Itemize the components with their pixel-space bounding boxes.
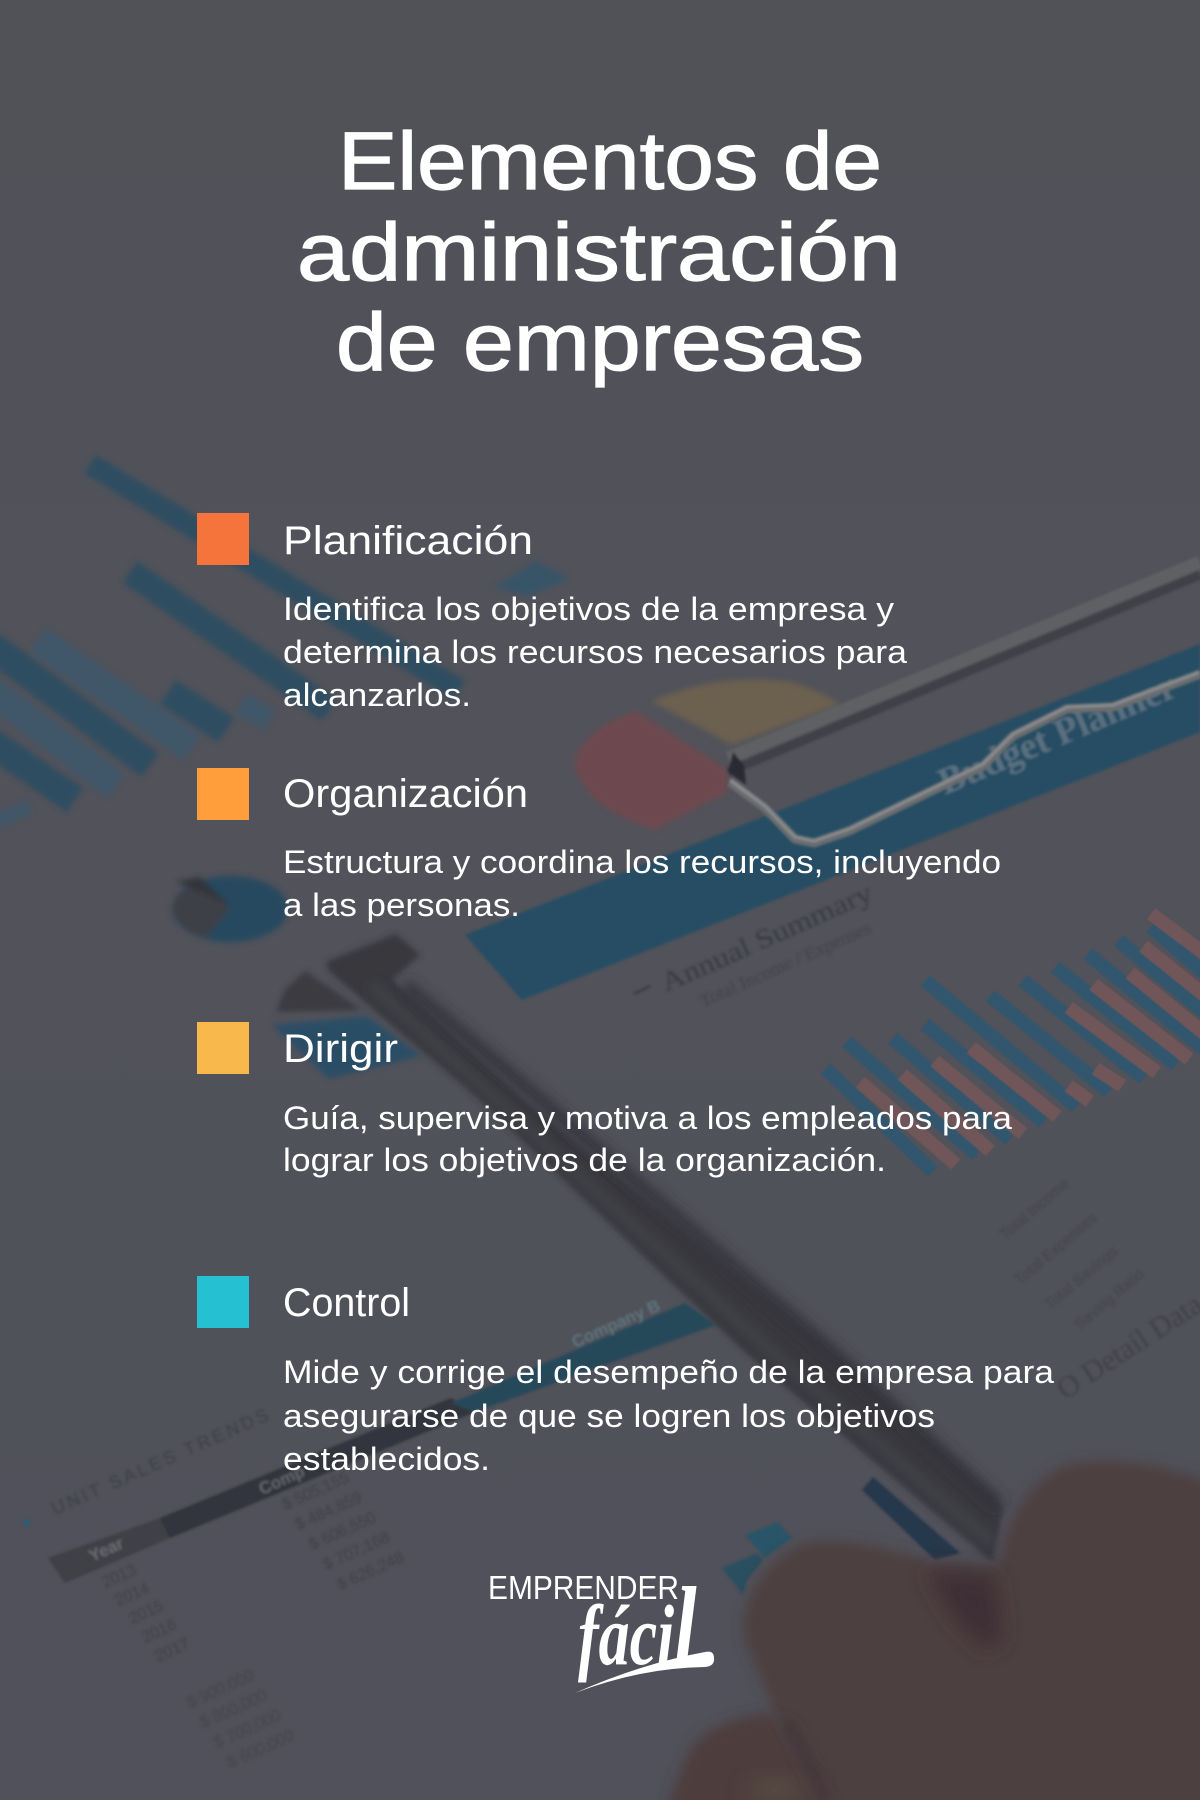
table figures: $ 606,550 [307, 1509, 379, 1554]
text: Planificación description: determina los recursos necesarios para [283, 634, 907, 670]
table figures: $ 626,248 [335, 1549, 407, 1594]
unit sales table: UNIT SALES TRENDS [48, 1405, 271, 1519]
item: Control [197, 1276, 1054, 1477]
text: Control description: asegurarse de que se logren los objetivos [283, 1398, 935, 1434]
title: Elementos de [338, 116, 882, 207]
text: Dirigir description: Guía, supervisa y motiva a los empleados para [283, 1100, 1012, 1136]
unit sales table: Comp [256, 1462, 308, 1499]
unit sales table [24, 1296, 716, 1583]
table figures: 2014 [113, 1580, 152, 1610]
text: Planificación description: alcanzarlos. [283, 677, 471, 713]
text: Planificación description: Identifica los objetivos de la empresa y [283, 591, 894, 627]
report labels: Total Income [997, 1175, 1073, 1243]
report labels [634, 877, 1200, 1406]
report labels: Total Income / Expenses [697, 918, 874, 1011]
table figures: $ 505,155 [280, 1469, 352, 1514]
text: Control description: Mide y corrige el desempeño de la empresa para [283, 1354, 1054, 1390]
heading: Dirigir: Dirigir [283, 1027, 398, 1071]
text: Dirigir description [283, 1100, 1012, 1178]
pie charts [172, 679, 840, 1079]
heading: Organización: Organización [283, 772, 528, 816]
icon: amber square [197, 768, 249, 820]
teal header band [465, 644, 1200, 1000]
logo: Emprender fácil: EMPRENDER [488, 1569, 679, 1606]
text: Organización description: Estructura y coordina los recursos, incluyendo [283, 844, 1001, 880]
logo: Emprender fácil [488, 1565, 714, 1693]
item: Dirigir [197, 1022, 1012, 1178]
clipboard clip and wire [728, 562, 1200, 843]
table figures: $ 484,859 [293, 1489, 365, 1534]
table figures: $ 800,000 [198, 1687, 270, 1732]
hand [665, 1461, 1200, 1800]
text: Organización description [283, 844, 1001, 923]
table figures: $ 707,168 [321, 1529, 393, 1574]
unit sales table: Year [86, 1534, 127, 1566]
table figures [100, 1469, 407, 1772]
report labels: Annual Summary [656, 877, 877, 997]
title [297, 116, 901, 388]
report labels: Saving Ratio [1072, 1265, 1148, 1333]
table figures: 2016 [140, 1617, 179, 1647]
heading: Planificación: Planificación [283, 519, 533, 563]
text: Dirigir description: lograr los objetivos de la organización. [283, 1142, 886, 1178]
icon: cyan square [197, 1276, 249, 1328]
report bar chart [826, 914, 1200, 1172]
text: Control description [283, 1354, 1054, 1477]
table figures: $ 600,000 [225, 1727, 297, 1772]
table figures: 2017 [153, 1636, 192, 1666]
left bar chart [0, 464, 570, 822]
report labels: Total Expenses [1012, 1210, 1101, 1288]
teal header band: Budget Planner [932, 665, 1183, 803]
icon: yellow square [197, 1022, 249, 1074]
title: administración [297, 207, 901, 298]
text: Organización description: a las personas. [283, 887, 520, 923]
text: Planificación description [283, 591, 907, 713]
logo: Emprender fácil: fácil [578, 1565, 697, 1689]
item: Planificación [197, 513, 907, 713]
table figures: 2013 [100, 1562, 139, 1592]
clipboard dark edge [326, 934, 1003, 1562]
table figures: 2015 [127, 1598, 166, 1628]
heading: Control: Control [283, 1281, 410, 1325]
title: de empresas [336, 297, 864, 388]
icon: orange square [197, 513, 249, 565]
text: Control description: establecidos. [283, 1441, 490, 1477]
table figures: $ 900,000 [185, 1667, 257, 1712]
report labels: Total Savings [1042, 1243, 1121, 1313]
small blue chart fragments [722, 1522, 792, 1595]
item: Organización [197, 768, 1001, 923]
unit sales table: Company B [569, 1296, 663, 1352]
table figures: $ 700,000 [212, 1707, 284, 1752]
